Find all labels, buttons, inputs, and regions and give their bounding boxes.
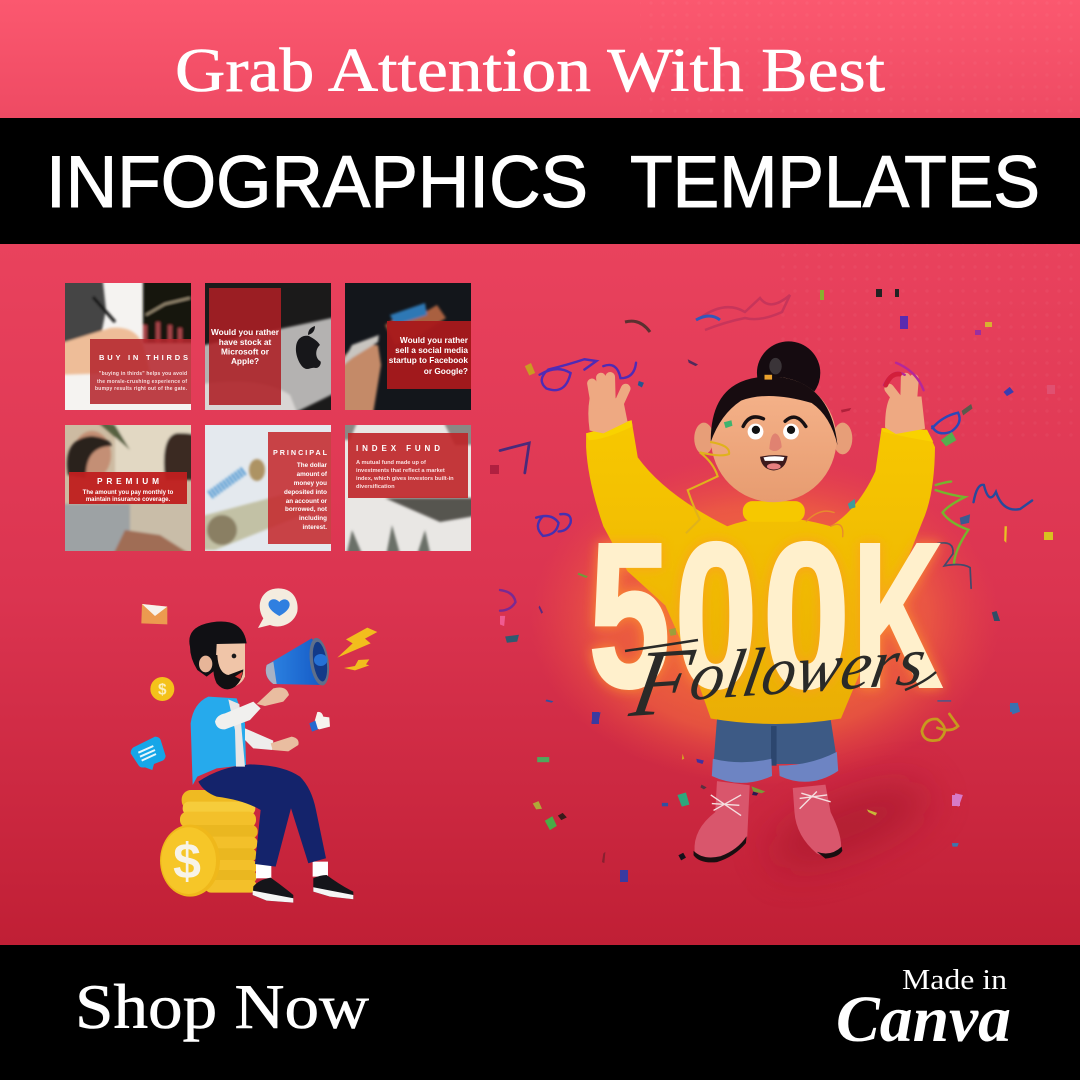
thumbnail: index fund [345, 425, 471, 551]
stat: 500K glowing text: 0 [675, 500, 757, 730]
thumbnail: principal: The dollar [297, 462, 328, 469]
right hand [886, 378, 924, 433]
thumbnail: buy in thirds: bumpy results right out of the gate. [95, 386, 188, 392]
bottom band [0, 945, 1080, 1080]
icon: heart speech bubble [258, 588, 298, 628]
sweater [586, 420, 935, 724]
head [711, 377, 836, 502]
thumbnail: stock at microsoft or apple: Would you rather [211, 327, 280, 337]
hair bun [757, 341, 820, 405]
icon: chat bubble [131, 737, 166, 770]
thumbnail: social media startup [345, 283, 471, 410]
floor shadow [761, 769, 939, 881]
thumbnail: social media startup: startup to Facebook [389, 355, 468, 365]
thumbnail: buy in thirds: BUY IN THIRDS [99, 353, 188, 362]
soft glow behind 500K [530, 455, 1000, 785]
ears [694, 423, 852, 454]
thumbnail: premium: The amount you pay monthly to [83, 490, 174, 496]
thumbnail: principal: amount of [297, 471, 328, 478]
thumbnail: stock at microsoft or apple: have stock at [219, 337, 272, 347]
stat: 500K glowing text: 0 [763, 500, 850, 730]
thumbnail: buy in thirds: the morale-crushing experience of [97, 379, 187, 385]
thumbnail: premium: PREMIUM [97, 476, 159, 486]
face [724, 375, 806, 471]
stat: 500K glowing text: 5 [589, 500, 670, 730]
script: followers: F [623, 627, 702, 737]
page background [0, 244, 1080, 945]
man figure [189, 621, 353, 903]
icon: coin small: $ [158, 682, 167, 699]
extra confetti above characters [490, 289, 1055, 882]
thumbnail: index fund: index, which gives investors built-in [356, 476, 454, 482]
thumbnail: index fund: INDEX FUND [356, 444, 440, 453]
thumbnail: principal: borrowed, not [285, 506, 328, 513]
heading: grab attention: Grab Attention With Best [175, 37, 885, 105]
thumbnail: social media startup: or Google? [424, 366, 468, 376]
top banner [0, 0, 1080, 118]
legs and boots [694, 719, 842, 862]
thumbnail: premium: maintain insurance coverage. [86, 497, 171, 503]
canva wordmark: Canva [836, 983, 1011, 1056]
heading: infographics templates: INFOGRAPHICS [46, 142, 588, 223]
illustration: man with megaphone on coins [131, 588, 377, 903]
icon: envelope [141, 604, 167, 624]
hair [711, 376, 838, 445]
thumbnail: premium [65, 425, 191, 551]
thumbnail: principal [195, 425, 331, 551]
icon: coin small [150, 677, 174, 701]
thumbnail: principal: deposited into [284, 489, 327, 496]
heading: infographics templates [46, 142, 1040, 223]
icon: thumbs up [309, 712, 330, 732]
thumbnail: index fund: A mutual fund made up of [356, 460, 426, 466]
thumbnail: principal: interest. [302, 524, 327, 531]
stat: 500K glowing text: 5 [589, 500, 670, 730]
stat: 500K glowing text: 0 [675, 500, 757, 730]
title band [0, 118, 1080, 244]
thumbnail: principal: an account or [286, 498, 328, 505]
thumbnail: social media startup: sell a social media [395, 345, 468, 355]
thumbnail: stock at microsoft or apple [205, 283, 331, 410]
thumbnail: index fund: investments that reflect a market [356, 468, 445, 474]
stat: 500K glowing text [589, 500, 942, 730]
coin stack: $ [173, 833, 201, 889]
left hand [589, 377, 627, 433]
thumbnail: principal: money you [294, 480, 327, 487]
stat: 500K glowing text: K [853, 500, 942, 730]
thumbnail: buy in thirds [65, 283, 191, 410]
call to action: shop now: Shop Now [75, 972, 370, 1042]
coin stack [160, 790, 258, 897]
thumbnail: buy in thirds: "buying in thirds" helps you avoid [99, 371, 187, 377]
yellow streamer [686, 442, 729, 533]
thumbnail: stock at microsoft or apple: Microsoft or [221, 346, 270, 356]
thumbnail: index fund: diversification [356, 484, 395, 490]
icon: lightning bolts [337, 628, 377, 670]
thumbnail: principal: including [299, 515, 327, 522]
megaphone [266, 637, 332, 687]
thumbnail: principal: PRINCIPAL [273, 448, 328, 457]
script: followers [623, 611, 936, 737]
stat: 500K glowing text: K [853, 500, 942, 730]
thumbnail: social media startup: Would you rather [400, 335, 469, 345]
heading: infographics templates: TEMPLATES [630, 142, 1040, 223]
made in: Made in [902, 965, 1007, 996]
stat: 500K glowing text: 0 [763, 500, 850, 730]
confetti and ribbons [500, 359, 1032, 741]
script: followers: ollowers [685, 622, 932, 715]
thumbnail: stock at microsoft or apple: Apple? [231, 356, 259, 366]
illustration: celebrating woman [500, 341, 1032, 863]
